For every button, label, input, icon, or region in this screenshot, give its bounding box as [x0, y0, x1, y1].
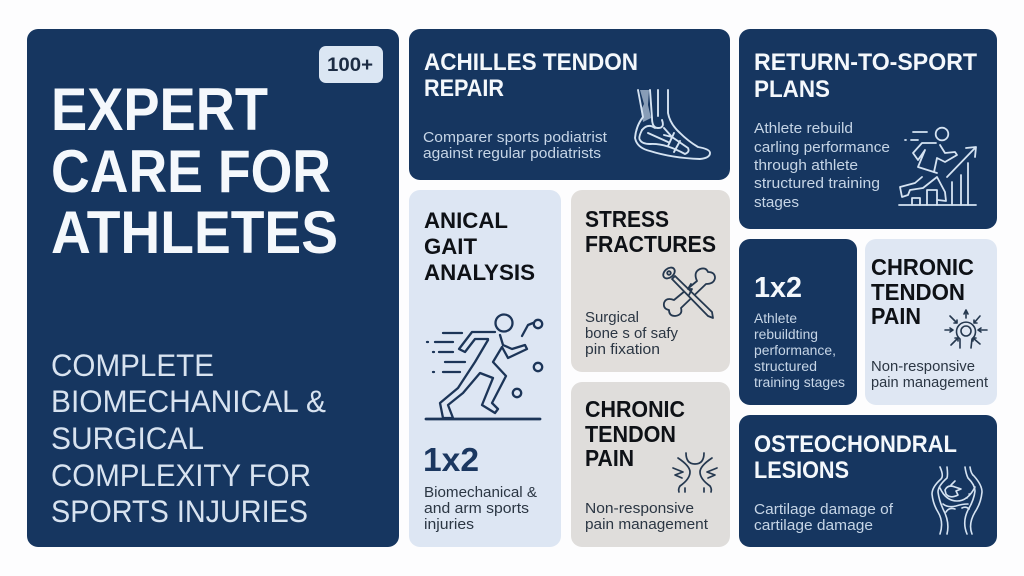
text: stat description: rebuildting	[754, 327, 818, 342]
text: nerve description: pain management	[871, 375, 988, 391]
heading: gait analysis: GAIT	[424, 234, 477, 259]
panel: 1x2 stat	[739, 239, 857, 405]
text: gait description: injuries	[424, 517, 474, 533]
icon: bone and pin	[661, 265, 715, 318]
subtitle: SPORTS INJURIES	[51, 493, 308, 529]
heading: chronic tendon pain 2	[871, 254, 974, 329]
panel: return-to-sport plans	[739, 29, 997, 229]
text: return description: structured training	[754, 176, 880, 192]
heading: osteochondral: LESIONS	[754, 457, 849, 484]
heading: stress fractures	[585, 206, 716, 257]
subtitle: COMPLEXITY FOR	[51, 457, 311, 493]
text: return description: Athlete rebuild	[754, 121, 853, 137]
heading: stress fractures: STRESS	[585, 206, 669, 232]
heading: gait analysis: ANICAL	[424, 208, 508, 233]
text: return description: through athlete	[754, 158, 858, 174]
heading: osteochondral	[754, 431, 957, 484]
text: stat description: Athlete	[754, 311, 797, 326]
text: chronic description	[585, 501, 708, 533]
heading: return to sport: PLANS	[754, 76, 830, 103]
heading: gait analysis: ANALYSIS	[424, 260, 535, 285]
title: EXPERT	[51, 76, 268, 143]
heading: chronic tendon pain 2: PAIN	[871, 303, 921, 329]
heading: chronic tendon pain	[585, 396, 685, 471]
stat: 1x2 dark: 1x2	[754, 272, 802, 304]
heading: chronic tendon pain: PAIN	[585, 445, 634, 471]
subtitle	[51, 347, 326, 529]
title	[51, 76, 338, 266]
icon: knee joint	[932, 467, 982, 534]
badge: 100+	[319, 46, 383, 83]
panel: achilles tendon repair	[409, 29, 730, 180]
text: stress description: Surgical	[585, 310, 639, 326]
text: osteochondral description	[754, 502, 894, 534]
icon: runner	[426, 314, 542, 419]
text: stat description: structured	[754, 359, 817, 374]
text: chronic description: pain management	[585, 517, 708, 533]
text: stat description	[754, 311, 845, 390]
stat: 1x2: 1x2	[423, 441, 479, 478]
text: achilles description	[423, 130, 607, 162]
panel: stress fractures	[571, 190, 730, 372]
text: gait description: and arm sports	[424, 501, 529, 517]
heading: gait analysis	[424, 208, 535, 285]
text: stress description: pin fixation	[585, 342, 660, 358]
heading: return to sport: RETURN-TO-SPORT	[754, 49, 977, 76]
text: nerve description: Non-responsive	[871, 359, 975, 375]
text: stat description: performance,	[754, 343, 836, 358]
icon: foot	[635, 90, 710, 159]
heading: osteochondral: OSTEOCHONDRAL	[754, 431, 957, 458]
heading: chronic tendon pain: TENDON	[585, 421, 676, 447]
subtitle: COMPLETE	[51, 347, 214, 383]
heading: chronic tendon pain: CHRONIC	[585, 396, 685, 422]
text: achilles description: Comparer sports podiatrist	[423, 130, 607, 146]
text: return description	[754, 121, 890, 211]
title: CARE FOR	[51, 138, 331, 205]
heading: chronic tendon pain 2: TENDON	[871, 279, 965, 305]
text: achilles description: against regular podiatrists	[423, 146, 601, 162]
text: return description: stages	[754, 195, 799, 211]
subtitle: BIOMECHANICAL &	[51, 383, 326, 419]
text: stat description: training stages	[754, 375, 845, 390]
heading: achilles: ACHILLES TENDON	[424, 49, 638, 76]
subtitle: SURGICAL	[51, 420, 204, 456]
title: ATHLETES	[51, 199, 338, 266]
panel: hero	[27, 29, 399, 547]
panel: gait analysis	[409, 190, 561, 547]
panel: chronic tendon pain (grey)	[571, 382, 730, 547]
text: osteochondral description: cartilage damage	[754, 518, 873, 534]
panel: chronic tendon pain (blue)	[865, 239, 997, 405]
heading: achilles	[424, 49, 638, 102]
heading: return to sport	[754, 49, 977, 103]
badge: 100+: 100+	[327, 55, 373, 76]
icon: joint pain	[673, 453, 717, 492]
heading: chronic tendon pain 2: CHRONIC	[871, 254, 974, 280]
text: gait description: Biomechanical &	[424, 485, 537, 501]
text: osteochondral description: Cartilage damage of	[754, 502, 894, 518]
heading: achilles: REPAIR	[424, 75, 504, 102]
text: gait description	[424, 485, 537, 533]
icon: nerve pain	[945, 310, 987, 348]
panel: osteochondral lesions	[739, 415, 997, 547]
text: chronic description: Non-responsive	[585, 501, 694, 517]
icon: climbing athlete with growth chart	[899, 128, 976, 205]
text: stress description	[585, 310, 679, 358]
text: nerve description	[871, 359, 988, 391]
text: stress description: bone s of safy	[585, 326, 679, 342]
text: return description: carling performance	[754, 140, 890, 156]
heading: stress fractures: FRACTURES	[585, 231, 716, 257]
